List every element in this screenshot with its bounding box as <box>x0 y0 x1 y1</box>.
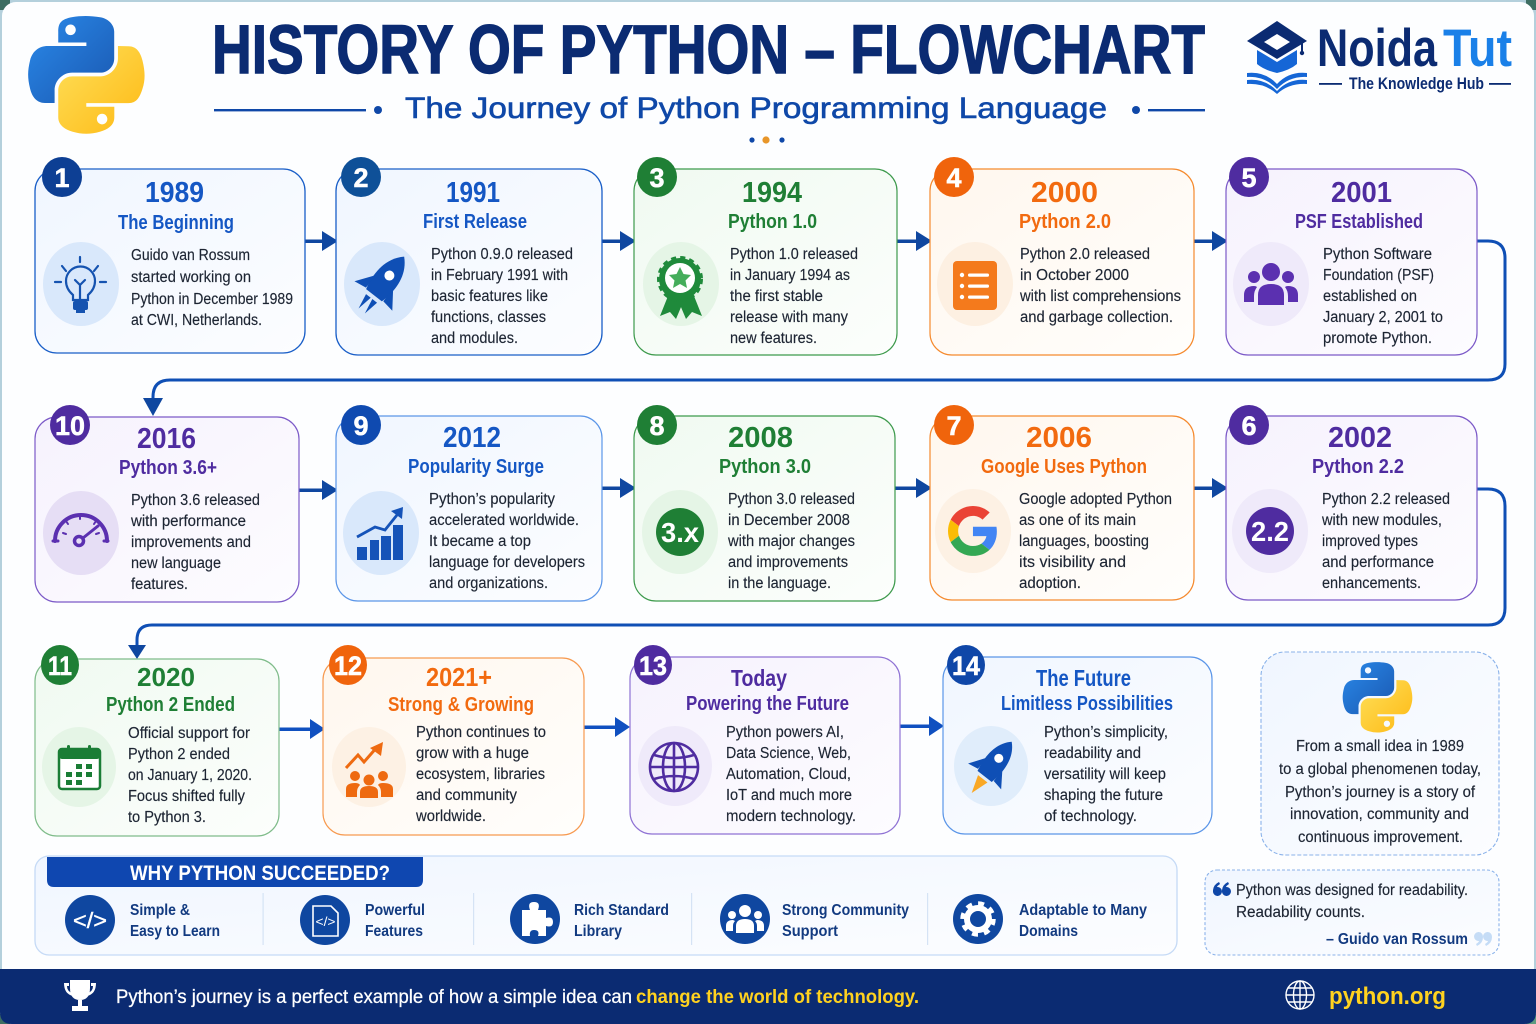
icon: rising bar chart <box>343 491 419 575</box>
description: versatility will keep <box>1044 766 1166 783</box>
description: Python 3.0 released <box>728 491 855 508</box>
description: and modules. <box>431 330 518 347</box>
description: with major changes <box>727 533 855 550</box>
item: simple and easy to learn: Simple & <box>130 902 190 919</box>
description: language for developers <box>429 554 585 571</box>
year: 2002 <box>1328 422 1392 454</box>
badge 14 <box>947 645 985 685</box>
description <box>727 491 855 592</box>
description: in February 1991 with <box>431 267 568 284</box>
icon: trophy <box>64 980 96 1011</box>
description: ecosystem, libraries <box>416 766 545 783</box>
arrow 2 to 3 <box>602 231 636 251</box>
quote text <box>1236 882 1468 921</box>
badge 13 <box>634 645 672 685</box>
icon: 2.2: 2.2 <box>1251 516 1289 547</box>
year: 2000 <box>1031 177 1098 209</box>
badge 13: 13 <box>639 651 667 681</box>
panel: The Future Limitless Possibilities <box>943 645 1212 834</box>
panel: 2012 Popularity Surge <box>336 405 602 601</box>
description: functions, classes <box>431 309 546 326</box>
year: 2006 <box>1026 422 1092 454</box>
arrow 9 to 8 <box>602 478 636 498</box>
heading: Google Uses Python <box>981 456 1147 478</box>
description: Foundation (PSF) <box>1323 267 1434 284</box>
description <box>1321 491 1450 592</box>
description: Focus shifted fully <box>128 788 245 805</box>
panel: 1991 First Release <box>336 157 602 355</box>
year: 1989 <box>145 177 204 209</box>
description: improvements and <box>131 534 251 551</box>
icon: rocket with flame <box>954 726 1028 806</box>
icon: opening quote <box>1213 882 1231 896</box>
description: started working on <box>131 269 251 286</box>
icon: gauge <box>43 491 119 575</box>
badge 7: 7 <box>946 411 962 441</box>
description <box>1044 724 1168 825</box>
badge 7 <box>934 405 974 445</box>
description: the first stable <box>730 288 823 305</box>
year: 2008 <box>728 422 793 454</box>
note text: to a global phenomenen today, <box>1279 761 1481 778</box>
icon: graduation cap and book <box>1247 21 1307 94</box>
description: Python continues to <box>416 724 546 741</box>
badge 14: 14 <box>952 651 980 681</box>
description <box>429 491 585 592</box>
description: in October 2000 <box>1020 267 1129 284</box>
badge 8: 8 <box>649 411 665 441</box>
badge 1 <box>42 157 82 197</box>
arrow 7 to 6 <box>1194 478 1228 498</box>
item: powerful features <box>300 895 425 945</box>
icon: globe <box>638 726 712 806</box>
icon: list document <box>937 242 1013 326</box>
description: to Python 3. <box>128 809 206 826</box>
panel: 1989 The Beginning <box>35 157 305 353</box>
panel: summary note <box>1261 652 1499 855</box>
description: Python 2.0 released <box>1020 246 1150 263</box>
heading: Strong & Growing <box>388 694 534 716</box>
description: Python’s simplicity, <box>1044 724 1168 741</box>
badge 10: 10 <box>55 411 85 441</box>
description: Guido van Rossum <box>131 247 250 264</box>
item: powerful features: </> <box>316 914 336 929</box>
description: new features. <box>730 330 817 347</box>
description: Python Software <box>1323 246 1432 263</box>
panel: 2008 Python 3.0 <box>634 405 895 601</box>
icon: 3.x: 3.x <box>661 517 699 548</box>
description: accelerated worldwide. <box>429 512 579 529</box>
heading: Limitless Possibilities <box>1001 693 1173 715</box>
description: Python 0.9.0 released <box>431 246 573 263</box>
brand logo: NoidaTut: The Knowledge Hub <box>1349 74 1484 93</box>
description: with list comprehensions <box>1019 288 1181 305</box>
python logo small <box>1343 662 1412 733</box>
icon: award ribbon <box>643 242 719 326</box>
icon: 3.x <box>642 490 718 574</box>
description: worldwide. <box>415 808 486 825</box>
connector: row 1 to row 2 <box>143 241 1505 416</box>
heading: Powering the Future <box>686 693 849 715</box>
heading tab <box>47 857 423 887</box>
badge 9 <box>341 405 381 445</box>
description: of technology. <box>1044 808 1137 825</box>
badge 9: 9 <box>353 411 369 441</box>
arrow 8 to 7 <box>895 478 932 498</box>
heading: Python 3.0 <box>719 456 811 478</box>
description <box>128 725 252 826</box>
year: The Future <box>1036 665 1131 691</box>
year: 2020 <box>137 662 195 692</box>
badge 11: 11 <box>48 651 72 681</box>
item: adaptable to many domains: Adaptable to Many <box>1019 902 1147 919</box>
description: established on <box>1323 288 1417 305</box>
heading: Popularity Surge <box>408 456 544 478</box>
description: Python in December 1989 <box>131 291 293 308</box>
brand logo: NoidaTut: Tut <box>1443 19 1512 78</box>
icon: light bulb <box>43 242 119 326</box>
note text: innovation, community and <box>1290 806 1469 823</box>
description: with new modules, <box>1321 512 1442 529</box>
badge 10 <box>50 405 90 445</box>
badge 3 <box>637 157 677 197</box>
note text <box>1279 738 1481 846</box>
description: adoption. <box>1019 575 1081 592</box>
heading: Python 1.0 <box>728 211 817 233</box>
item: powerful features: Powerful <box>365 902 425 919</box>
description: on January 1, 2020. <box>128 767 252 784</box>
arrow 11 to 12 <box>279 719 325 739</box>
badge 12: 12 <box>334 651 362 681</box>
panel: 1994 Python 1.0 <box>634 157 897 355</box>
item: strong community support: Strong Community <box>782 902 909 919</box>
description: Python 2 ended <box>128 746 230 763</box>
subtitle: The Journey of Python Programming Language <box>405 92 1107 125</box>
description: Python 2.2 released <box>1322 491 1450 508</box>
badge 8 <box>637 405 677 445</box>
item: rich standard library: Library <box>574 923 622 940</box>
panel: 2006 Google Uses Python <box>930 405 1194 600</box>
description: enhancements. <box>1322 575 1421 592</box>
description: Python powers AI, <box>726 724 844 741</box>
description: in the language. <box>728 575 831 592</box>
description: its visibility and <box>1019 554 1126 571</box>
description: in January 1994 as <box>730 267 850 284</box>
brand logo: NoidaTut <box>1247 19 1512 94</box>
panel: 2001 PSF Established <box>1226 157 1477 355</box>
badge 5: 5 <box>1241 163 1257 193</box>
python logo <box>28 16 145 134</box>
quote text: Readability counts. <box>1236 904 1365 921</box>
description: basic features like <box>431 288 548 305</box>
badge 6 <box>1229 405 1269 445</box>
description: in December 2008 <box>728 512 850 529</box>
description: and organizations. <box>429 575 548 592</box>
icon: closing quote <box>1474 932 1492 946</box>
arrow 13 to 14 <box>900 716 944 736</box>
badge 3: 3 <box>649 163 665 193</box>
year: 1991 <box>446 177 500 209</box>
badge 5 <box>1229 157 1269 197</box>
description <box>1019 491 1172 592</box>
item: rich standard library: Rich Standard <box>574 902 669 919</box>
description: January 2, 2001 to <box>1323 309 1443 326</box>
badge 4 <box>934 157 974 197</box>
panel: quote <box>1205 870 1499 955</box>
item: rich standard library <box>510 894 669 944</box>
icon: 2.2 <box>1232 489 1308 573</box>
badge 6: 6 <box>1241 411 1257 441</box>
description: at CWI, Netherlands. <box>131 312 262 329</box>
description: as one of its main <box>1019 512 1136 529</box>
item: simple and easy to learn: </> <box>73 908 107 933</box>
footer highlight: change the world of technology. <box>636 987 919 1008</box>
description <box>1323 246 1443 347</box>
description: It became a top <box>429 533 531 550</box>
panel: why Python succeeded <box>35 856 1177 955</box>
badge 2 <box>341 157 381 197</box>
description <box>726 724 856 825</box>
panel: 2016 Python 3.6+ <box>35 405 299 602</box>
icon: people group <box>1233 242 1309 326</box>
arrow 1 to 2 <box>305 231 338 251</box>
year: 2001 <box>1331 177 1392 209</box>
description: Automation, Cloud, <box>726 766 851 783</box>
heading tab: WHY PYTHON SUCCEEDED? <box>130 862 390 885</box>
item: simple and easy to learn <box>65 895 220 945</box>
year: 2016 <box>137 423 196 455</box>
heading: First Release <box>423 211 527 233</box>
heading: PSF Established <box>1295 211 1423 233</box>
description: and garbage collection. <box>1020 309 1173 326</box>
panel: 2000 Python 2.0 <box>930 157 1194 355</box>
description: grow with a huge <box>416 745 529 762</box>
panel: 2020 Python 2 Ended <box>35 645 279 836</box>
description: with performance <box>130 513 246 530</box>
description: languages, boosting <box>1019 533 1149 550</box>
icon: calendar <box>42 727 116 807</box>
description: improved types <box>1322 533 1418 550</box>
description: and performance <box>1322 554 1434 571</box>
year: 1994 <box>742 177 802 209</box>
badge 4: 4 <box>946 163 962 193</box>
note text: From a small idea in 1989 <box>1296 738 1464 755</box>
description: readability and <box>1044 745 1141 762</box>
heading: Python 3.6+ <box>119 457 217 479</box>
quote text: Python was designed for readability. <box>1236 882 1468 899</box>
description: features. <box>131 576 188 593</box>
item: strong community support <box>720 894 909 944</box>
badge 11 <box>41 645 79 685</box>
arrow 10 to 9 <box>299 480 338 500</box>
description <box>431 246 573 347</box>
heading: Python 2.2 <box>1312 456 1404 478</box>
arrow 4 to 5 <box>1194 231 1228 251</box>
website: python.org <box>1329 983 1446 1010</box>
arrow 12 to 13 <box>584 717 630 737</box>
subtitle <box>214 92 1205 144</box>
panel: 2002 Python 2.2 <box>1226 405 1477 600</box>
badge 1: 1 <box>54 163 70 193</box>
brand logo: NoidaTut: Noida <box>1317 19 1437 78</box>
panel: Today Powering the Future <box>630 645 900 834</box>
badge 12 <box>329 645 367 685</box>
heading: Python 2.0 <box>1019 211 1111 233</box>
heading: The Beginning <box>118 212 234 234</box>
description <box>415 724 546 825</box>
icon: globe <box>1286 981 1314 1009</box>
icon: growth and community <box>332 727 406 807</box>
description: Data Science, Web, <box>726 745 851 762</box>
icon: Google G <box>935 489 1011 573</box>
description: modern technology. <box>726 808 856 825</box>
item: adaptable to many domains: Domains <box>1019 923 1078 940</box>
year: 2012 <box>443 422 501 454</box>
footer band <box>0 969 1536 1024</box>
connector: row 2 to row 3 <box>128 489 1505 659</box>
title: HISTORY OF PYTHON – FLOWCHART <box>212 11 1205 88</box>
description: promote Python. <box>1323 330 1432 347</box>
description <box>1019 246 1181 326</box>
icon: rocket <box>343 242 423 326</box>
description: Python’s popularity <box>429 491 555 508</box>
description: Python 1.0 released <box>730 246 858 263</box>
description: and community <box>416 787 517 804</box>
description <box>730 246 858 347</box>
item: powerful features: Features <box>365 923 423 940</box>
description: Python 3.6 released <box>131 492 260 509</box>
year: 2021+ <box>426 662 492 692</box>
description: release with many <box>730 309 848 326</box>
description <box>131 247 293 329</box>
note text: continuous improvement. <box>1298 829 1463 846</box>
attribution: – Guido van Rossum <box>1326 931 1468 948</box>
item: simple and easy to learn: Easy to Learn <box>130 923 220 940</box>
item: strong community support: Support <box>782 923 839 940</box>
item: adaptable to many domains <box>953 894 1147 944</box>
panel: 2021+ Strong & Growing <box>323 645 584 835</box>
description: and improvements <box>728 554 848 571</box>
description: new language <box>131 555 221 572</box>
description <box>130 492 260 593</box>
heading: Python 2 Ended <box>106 694 235 716</box>
year: Today <box>731 665 787 691</box>
arrow 3 to 4 <box>897 231 932 251</box>
description: shaping the future <box>1044 787 1163 804</box>
badge 2: 2 <box>353 163 369 193</box>
note text: Python’s journey is a story of <box>1285 784 1476 801</box>
description: Google adopted Python <box>1019 491 1172 508</box>
description: IoT and much more <box>726 787 852 804</box>
description: Official support for <box>128 725 250 742</box>
footer message: Python’s journey is a perfect example of how a simple idea can <box>116 987 632 1008</box>
